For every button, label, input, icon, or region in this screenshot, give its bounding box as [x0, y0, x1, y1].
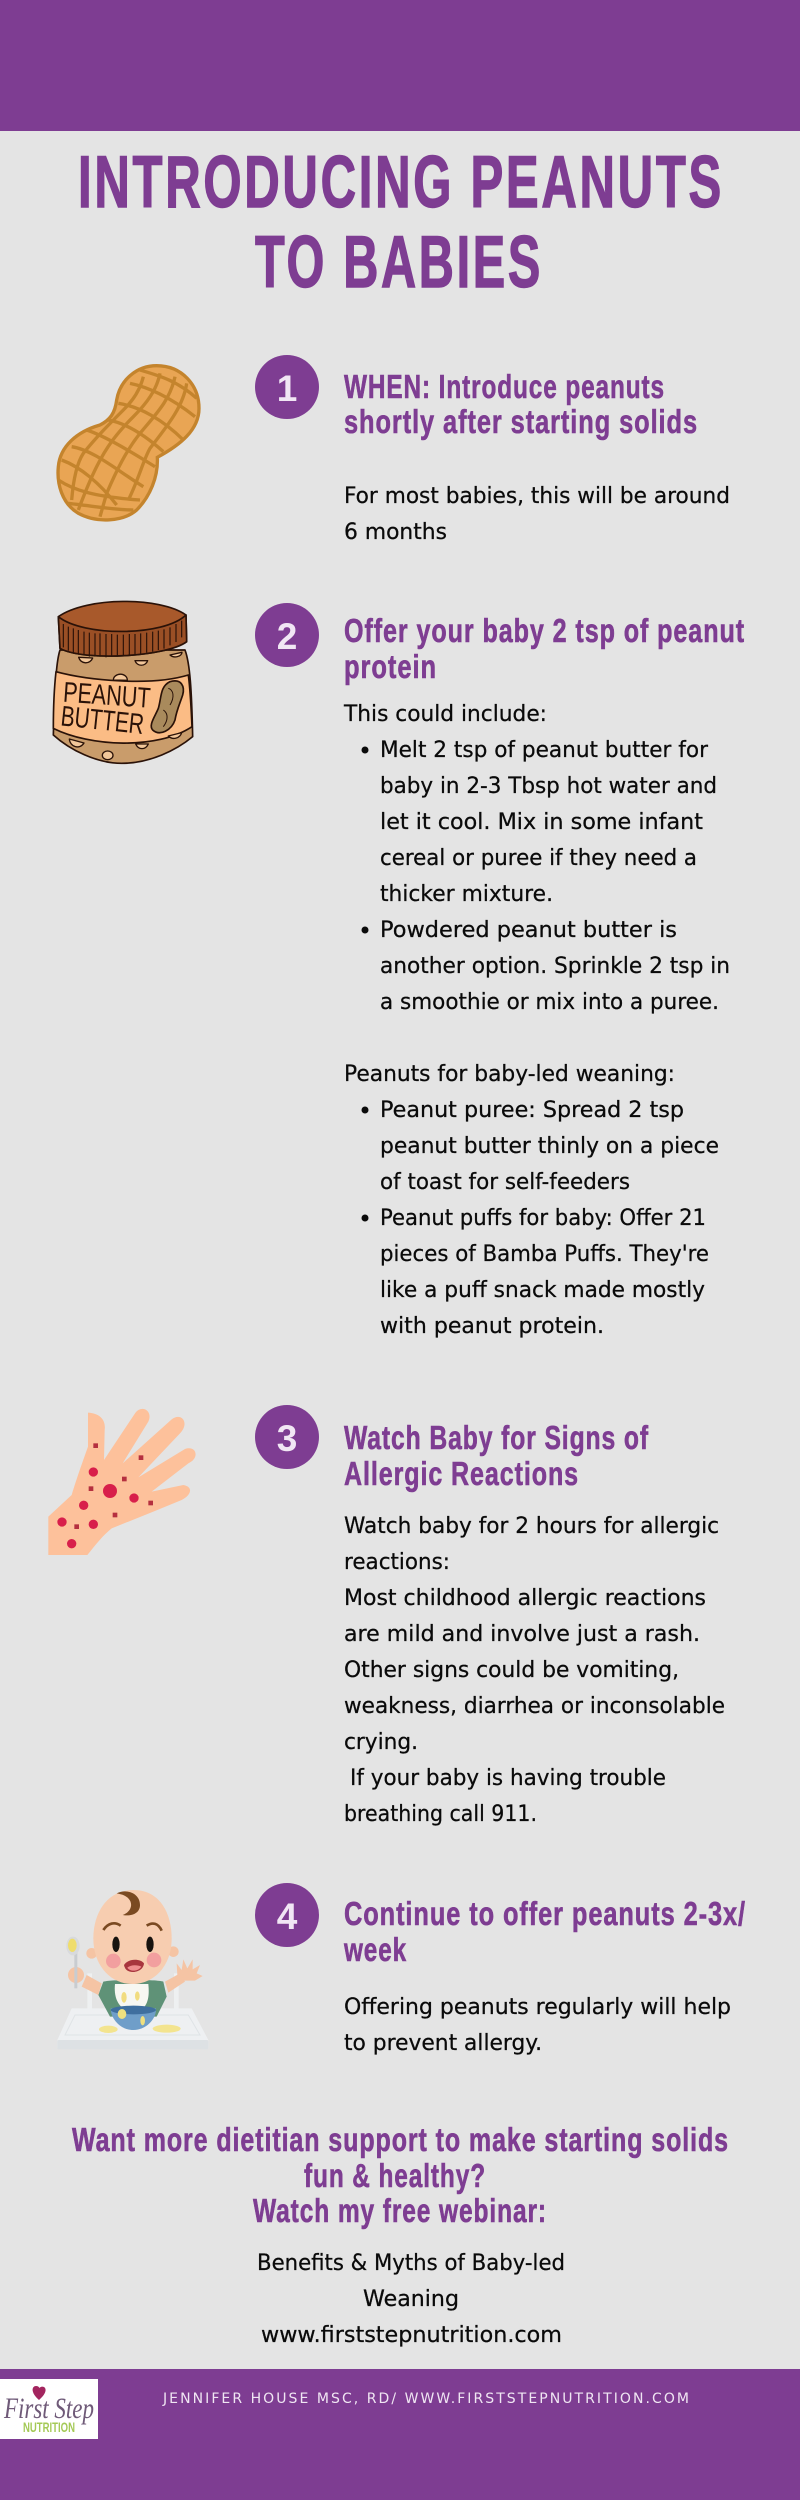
call to action heading	[72, 2121, 729, 2229]
list: baby-led weaning options	[362, 1098, 719, 1339]
list: step 2 options: thicker mixture.	[380, 882, 553, 907]
number badge 2	[255, 603, 319, 667]
text: step 1 body	[344, 484, 730, 545]
list: baby-led weaning options: Peanut puffs for baby: Offer 21	[380, 1206, 706, 1231]
text: step 1 body: For most babies, this will be around	[344, 484, 730, 509]
heading: step 3: Allergic Reactions	[344, 1455, 579, 1492]
list: step 2 options: another option. Sprinkle 2 tsp in	[380, 954, 730, 979]
text: step 3 body: weakness, diarrhea or inconsolable	[344, 1694, 725, 1719]
footer credit: JENNIFER HOUSE MSC, RD/ WWW.FIRSTSTEPNUTRITION.COM	[162, 2391, 689, 2407]
icon: hand with rash	[48, 1409, 196, 1555]
number badge 1: 1	[277, 368, 297, 409]
text: step 1 body: 6 months	[344, 520, 447, 545]
text: step 3 body: Watch baby for 2 hours for allergic	[344, 1514, 719, 1539]
number badge 3: 3	[277, 1418, 297, 1459]
icon: peanut butter jar	[53, 601, 193, 763]
text: step 3 body: reactions:	[344, 1550, 450, 1575]
header band	[0, 0, 800, 131]
text: step 4 body	[344, 1995, 731, 2056]
list: step 2 options: let it cool. Mix in some infant	[380, 810, 703, 835]
call to action heading: fun & healthy?	[304, 2157, 486, 2194]
list: baby-led weaning options: Peanut puree: Spread 2 tsp	[380, 1098, 684, 1123]
text: step 4 body: to prevent allergy.	[344, 2031, 542, 2056]
footer band	[0, 2369, 800, 2500]
call to action details	[257, 2251, 565, 2348]
logo: First Step Nutrition	[0, 2379, 98, 2439]
logo: First Step Nutrition: NUTRITION	[23, 2419, 75, 2435]
list: baby-led weaning options: with peanut protein.	[380, 1314, 604, 1339]
text: step 3 body	[344, 1514, 725, 1827]
text: step 3 body: breathing call 911.	[344, 1802, 537, 1827]
text: step 3 body: If your baby is having trouble	[350, 1766, 666, 1791]
call to action details: Benefits & Myths of Baby-led	[257, 2251, 565, 2276]
list: step 2 options: Powdered peanut butter is	[380, 918, 677, 943]
title	[78, 142, 724, 303]
heading: step 3	[344, 1419, 649, 1492]
list: step 2 options: baby in 2-3 Tbsp hot water and	[380, 774, 717, 799]
number badge 3	[255, 1405, 319, 1469]
text: step 3 body: Most childhood allergic reactions	[344, 1586, 706, 1611]
list: baby-led weaning options: like a puff snack made mostly	[380, 1278, 705, 1303]
heading: step 1: WHEN: Introduce peanuts	[344, 368, 665, 405]
list: step 2 options	[362, 738, 730, 1015]
text: step 4 body: Offering peanuts regularly will help	[344, 1995, 731, 2020]
text: baby-led weaning intro: Peanuts for baby-led weaning:	[344, 1062, 675, 1087]
call to action details: www.firststepnutrition.com	[261, 2323, 562, 2348]
number badge 1	[255, 355, 319, 419]
heading: step 1	[344, 368, 698, 440]
list: step 2 options: cereal or puree if they need a	[380, 846, 697, 871]
text: step 2 intro: This could include:	[343, 702, 547, 727]
title: TO BABIES	[255, 222, 543, 303]
list: step 2 options: Melt 2 tsp of peanut butter for	[380, 738, 709, 763]
text: step 3 body: Other signs could be vomiting,	[344, 1658, 679, 1683]
list: baby-led weaning options: peanut butter thinly on a piece	[380, 1134, 719, 1159]
call to action details: Weaning	[363, 2287, 459, 2312]
heading: step 2	[344, 612, 745, 685]
icon: peanut	[58, 366, 199, 520]
icon: baby in high chair	[57, 1890, 208, 2049]
text: step 3 body: are mild and involve just a rash.	[344, 1622, 700, 1647]
number badge 2: 2	[277, 616, 297, 657]
list: baby-led weaning options: of toast for self-feeders	[380, 1170, 630, 1195]
heading: step 1: shortly after starting solids	[344, 403, 698, 440]
number badge 4: 4	[277, 1896, 298, 1937]
heading: step 2: protein	[344, 648, 437, 685]
icon: peanut butter jar: BUTTER	[59, 700, 145, 741]
logo: First Step Nutrition: First Step	[3, 2392, 94, 2425]
heading: step 3: Watch Baby for Signs of	[344, 1419, 649, 1456]
text: step 3 body: crying.	[344, 1730, 418, 1755]
icon: peanut butter jar: PEANUT	[62, 677, 152, 715]
heading: step 4: week	[343, 1931, 407, 1968]
number badge 4	[255, 1883, 319, 1947]
call to action heading: Watch my free webinar:	[253, 2192, 547, 2229]
heading: step 4	[343, 1895, 746, 1968]
list: baby-led weaning options: pieces of Bamba Puffs. They're	[380, 1242, 709, 1267]
list: step 2 options: a smoothie or mix into a puree.	[380, 990, 719, 1015]
